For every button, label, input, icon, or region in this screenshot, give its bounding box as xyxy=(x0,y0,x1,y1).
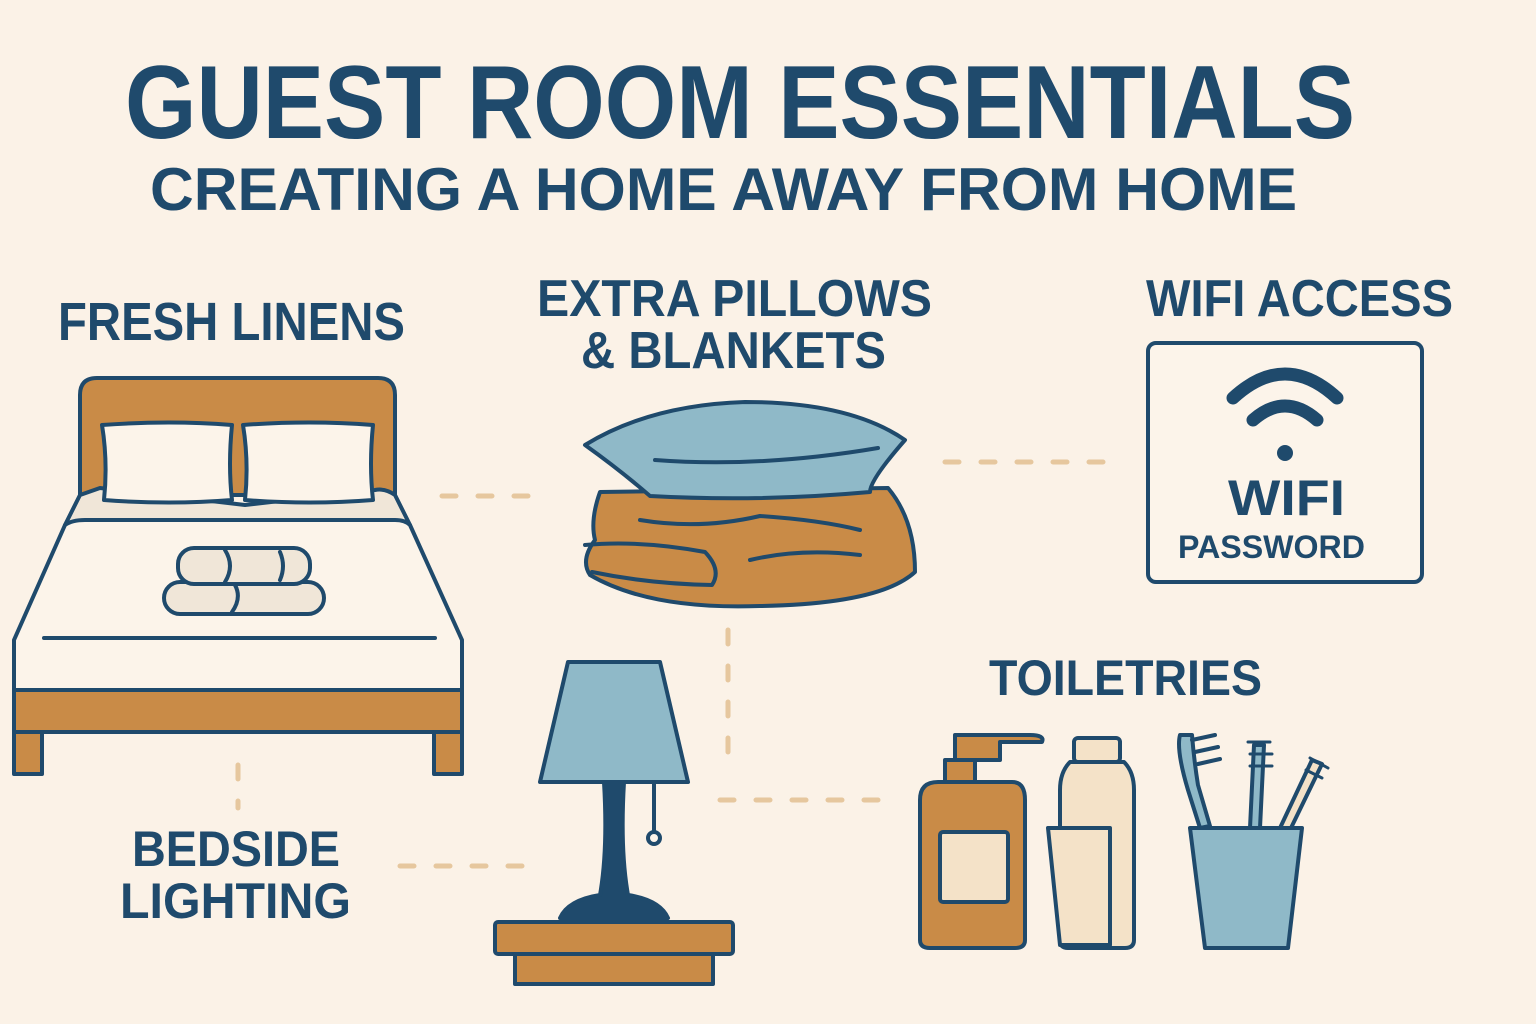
label: extra pillows & blankets xyxy=(537,270,932,380)
connector dashes xyxy=(238,462,1112,866)
title: GUEST ROOM ESSENTIALS xyxy=(125,45,1355,161)
icon: pillow and blanket xyxy=(585,402,915,606)
label: wifi access: WIFI ACCESS xyxy=(1146,270,1453,328)
icon: wifi card: WIFI xyxy=(1228,470,1345,526)
label: bedside lighting: BEDSIDE xyxy=(132,821,340,877)
icon: lamp on nightstand xyxy=(495,662,733,984)
icon: bed xyxy=(14,378,462,774)
icon: wifi card: PASSWORD xyxy=(1178,529,1365,565)
label: bedside lighting: LIGHTING xyxy=(120,873,351,929)
label: extra pillows & blankets: & BLANKETS xyxy=(581,322,886,380)
label: extra pillows & blankets: EXTRA PILLOWS xyxy=(537,270,932,328)
label: toiletries: TOILETRIES xyxy=(989,650,1262,706)
icon: wifi card xyxy=(1148,343,1422,582)
icon: toiletries xyxy=(920,735,1328,948)
subtitle: CREATING A HOME AWAY FROM HOME xyxy=(150,156,1297,223)
label: bedside lighting xyxy=(120,821,351,929)
label: fresh linens: FRESH LINENS xyxy=(58,292,405,352)
